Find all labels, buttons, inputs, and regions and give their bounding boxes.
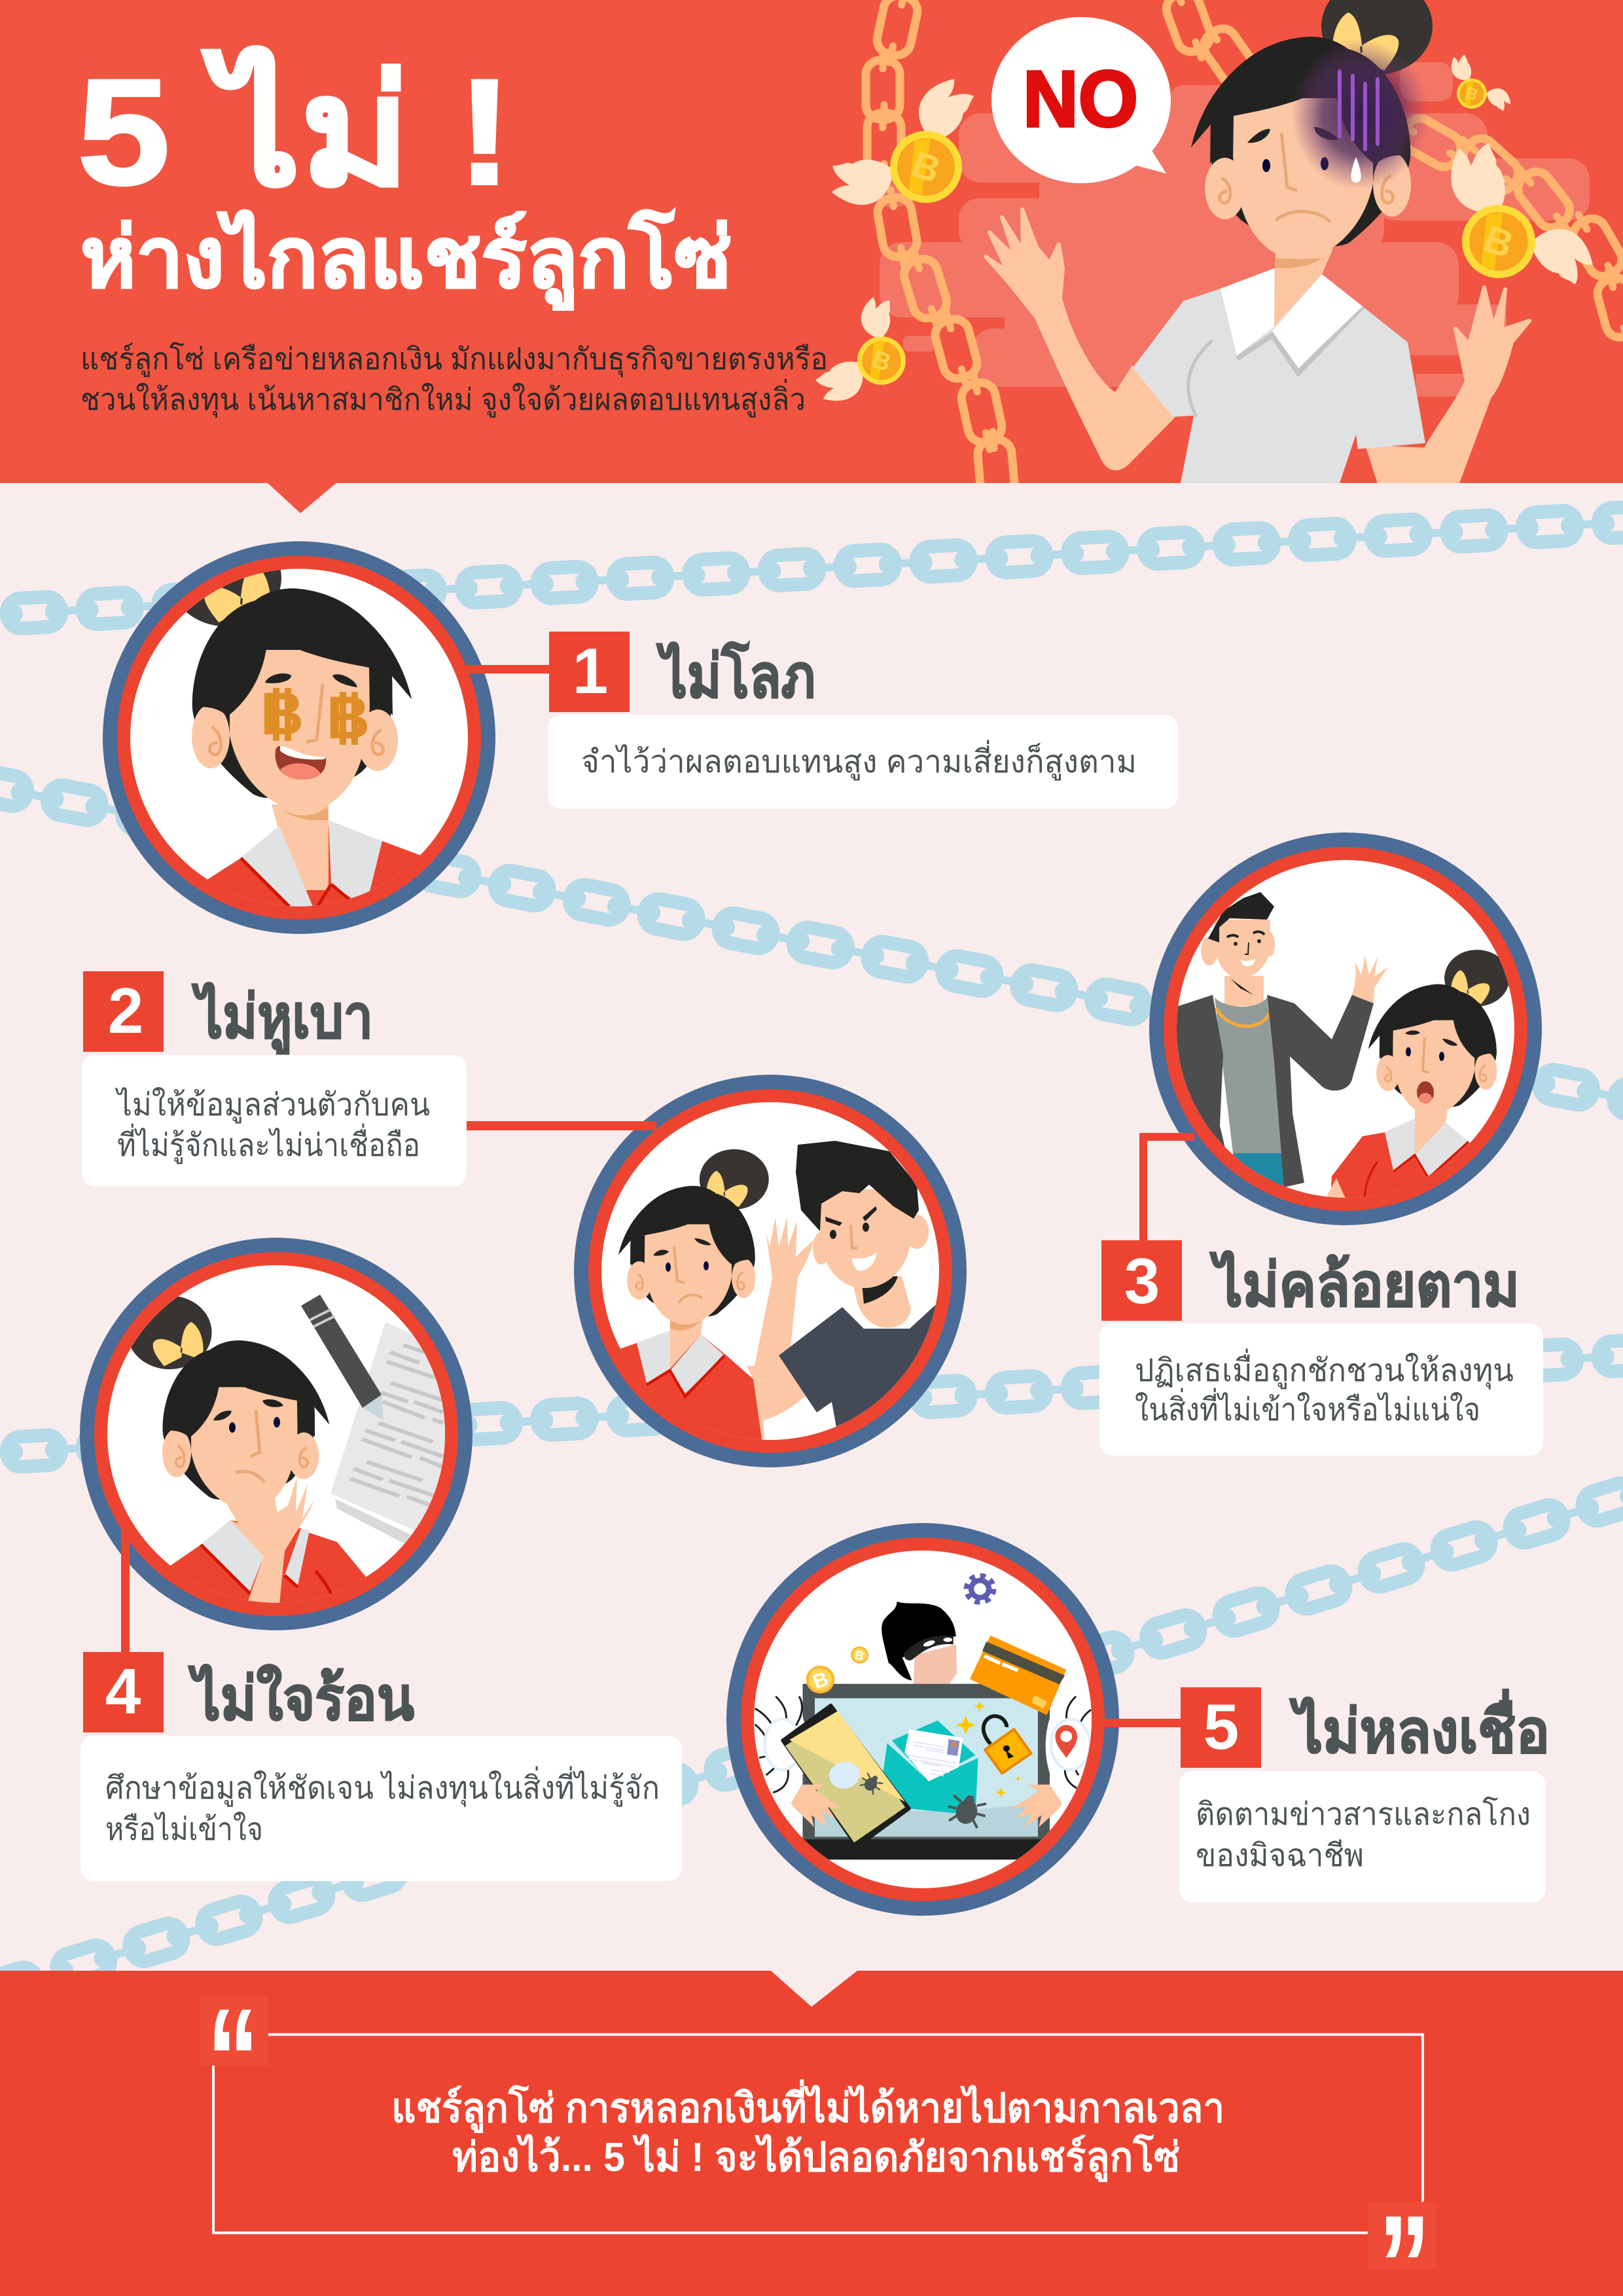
illustration: woman with bitcoin eyes: B: [260, 681, 304, 747]
number badge 2: 2: [108, 975, 143, 1047]
illustration: hero with coins and chains: [810, 0, 1623, 509]
subtitle: ห่างไกลแชร์ลูกโซ่: [80, 209, 732, 310]
icon: winged coin right big: [1451, 143, 1593, 284]
panel: circle 1 greedy woman: [103, 529, 495, 934]
number badge 2: [83, 971, 164, 1052]
card: item 2: ไม่ให้ข้อมูลส่วนตัวกับคน: [115, 1086, 430, 1124]
footer message: ท่องไว้... 5 ไม่ ! จะได้ปลอดภัยจากแชร์ลูกโซ่: [452, 2133, 1180, 2182]
panel: header banner: [0, 0, 1623, 513]
icon: envelope: [883, 1721, 978, 1816]
illustration: woman refusing man: [589, 1141, 949, 1473]
connector 5: [1103, 1719, 1181, 1727]
illustration: woman with bitcoin eyes: [170, 529, 471, 929]
connector 1: [466, 665, 549, 673]
card: item 4: ศึกษาข้อมูลให้ชัดเจน ไม่ลงทุนในสิ่งที่ไม่รู้จัก: [105, 1766, 660, 1807]
icon: coins: [806, 1647, 868, 1693]
footer message: แชร์ลูกโซ่ การหลอกเงินที่ไม่ได้หายไปตามกาลเวลา: [391, 2079, 1224, 2133]
illustration: thief with tablet: [755, 1575, 1098, 1859]
icon: phone: [783, 1705, 909, 1847]
number badge 3: [1101, 1240, 1182, 1321]
chain: middle chain: [0, 1318, 1623, 1487]
heading: item 5: ไม่หลงเชื่อ: [1289, 1689, 1550, 1765]
connector 3: [1143, 1137, 1194, 1240]
icon: coins: B: [810, 1667, 831, 1693]
card: item 3: [1099, 1323, 1543, 1456]
icon: gear: [966, 1575, 994, 1602]
card: item 3: ในสิ่งที่ไม่เข้าใจหรือไม่แน่ใจ: [1135, 1388, 1480, 1427]
speech bubble: NO: [991, 17, 1171, 183]
number badge 3: 3: [1124, 1245, 1160, 1317]
panel: circle 4 thinking woman: [80, 1238, 473, 1636]
card: item 3: ปฏิเสธเมื่อถูกชักชวนให้ลงทุน: [1135, 1348, 1514, 1390]
icon: coins: B: [853, 1649, 866, 1664]
panel: circle 5 online fraud: [726, 1523, 1119, 1916]
number badge 5: 5: [1204, 1691, 1239, 1763]
card: item 4: [80, 1736, 682, 1881]
opening quote mark: “: [207, 1979, 259, 2140]
card: item 5: ติดตามข่าวสารและกลโกง: [1196, 1796, 1531, 1832]
quote frame: [213, 2034, 1423, 2233]
card: item 2: ที่ไม่รู้จักและไม่น่าเชื่อถือ: [117, 1123, 420, 1164]
icon: hands: [791, 1785, 1062, 1827]
icon: large bug: [946, 1791, 989, 1828]
card: item 2: [82, 1055, 467, 1187]
card: item 1: จำไว้ว่าผลตอบแทนสูง ความเสี่ยงก็สูงตาม: [581, 740, 1137, 781]
icon: winged coin right small: [1452, 55, 1510, 111]
card: item 5: ของมิจฉาชีพ: [1196, 1839, 1364, 1873]
figure: worried woman: [986, 0, 1529, 483]
speech bubble: NO: NO: [1023, 54, 1138, 143]
number badge 1: [549, 632, 630, 712]
icon: padlock: [984, 1716, 1031, 1773]
intro paragraph: แชร์ลูกโซ่ เครือข่ายหลอกเงิน มักแฝงมากับธุรกิจขายตรงหรือ: [80, 342, 828, 378]
footer message: [391, 2079, 1224, 2182]
icon: credit card: [970, 1636, 1066, 1715]
number badge 5: [1181, 1687, 1261, 1768]
illustration: woman with bitcoin eyes: B: [327, 685, 370, 751]
number badge 4: [83, 1652, 164, 1732]
intro paragraph: [80, 342, 828, 418]
card: item 1: [548, 715, 1178, 809]
number badge 4: 4: [105, 1655, 141, 1727]
illustration: thinking woman with documents: [131, 1295, 445, 1603]
chain: lower rising chain: [0, 1439, 1623, 2047]
card: item 5: [1179, 1771, 1545, 1903]
card: item 4: หรือไม่เข้าใจ: [105, 1811, 263, 1847]
icon: map pin: [1055, 1725, 1077, 1758]
panel: circle 2 scammer and woman: [574, 1075, 967, 1473]
number badge 1: 1: [573, 635, 608, 707]
chain: descending chain: [0, 739, 1623, 1140]
icon: sparkles: [956, 1701, 1021, 1798]
intro paragraph: ชวนให้ลงทุน เน้นหาสมาชิกใหม่ จูงใจด้วยผลตอบแทนสูงลิ่ว: [80, 378, 806, 418]
heading: item 2: ไม่หูเบา: [191, 982, 373, 1054]
icon: winged coin left big: [831, 79, 974, 205]
heading: item 3: ไม่คล้อยตาม: [1209, 1251, 1520, 1319]
heading: item 1: ไม่โลภ: [656, 641, 815, 710]
heading: item 4: ไม่ใจร้อน: [188, 1664, 414, 1732]
chain: upper decorative chain: [0, 485, 1623, 644]
icon: pen: [301, 1295, 383, 1420]
connector 4: [121, 1530, 130, 1652]
illustration: man persuading woman: [1177, 892, 1508, 1198]
panel: circle 3 persuasion: [1149, 833, 1542, 1230]
icon: winged coin left small: [815, 297, 906, 401]
title: 5 no: 5 ไม่ !: [77, 46, 512, 216]
panel: footer: [0, 1971, 1623, 2296]
connector 2: [467, 1121, 656, 1130]
